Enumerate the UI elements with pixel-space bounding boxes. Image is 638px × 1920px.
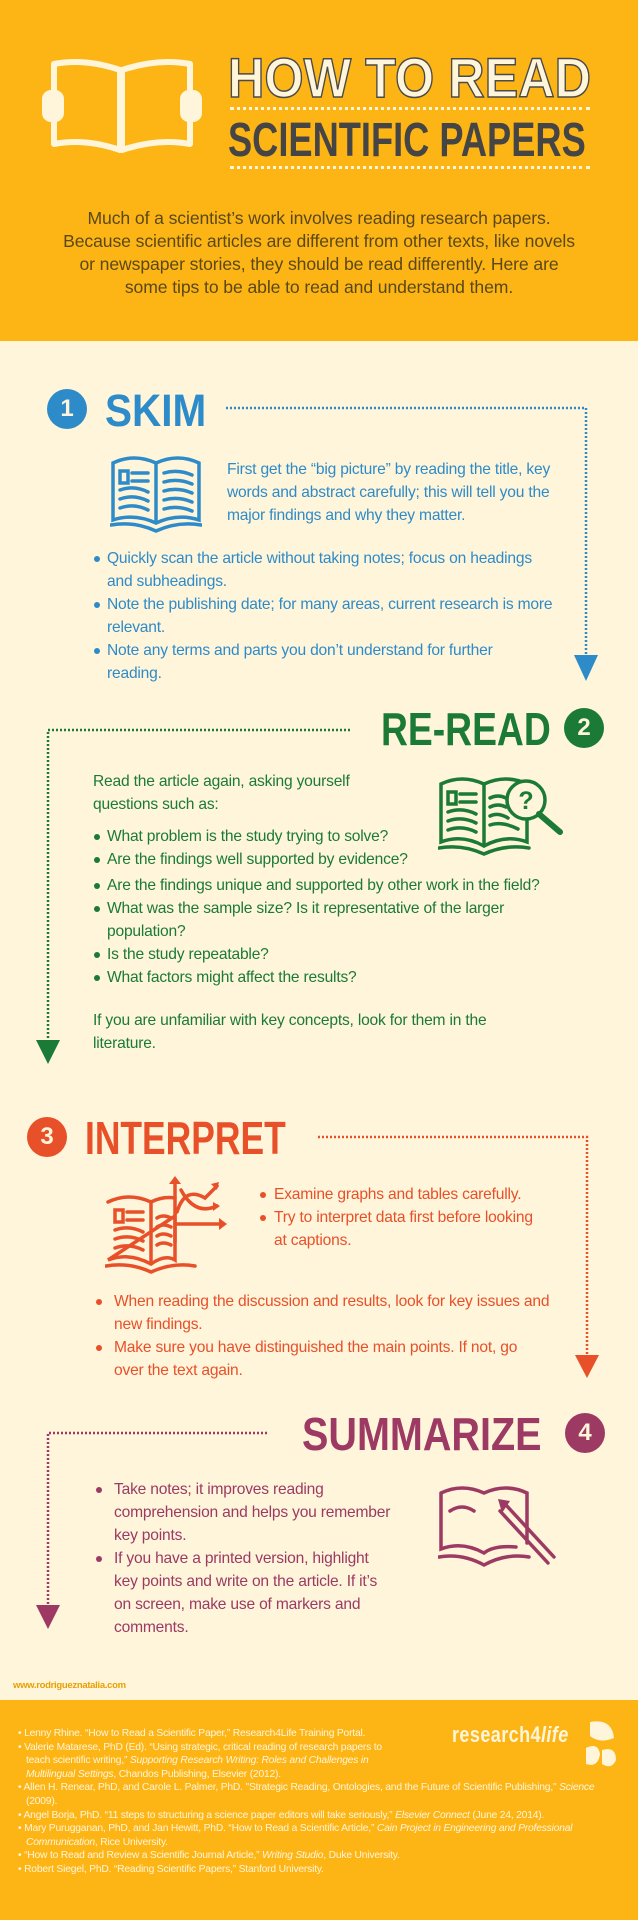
closing note: literature. bbox=[93, 1035, 156, 1052]
closing note bbox=[93, 1012, 486, 1052]
intro text: Because scientific articles are different from other texts, like novels bbox=[63, 231, 575, 251]
reference list: teach scientific writing,” Supporting Research Writing: Roles and Challenges in bbox=[26, 1755, 368, 1766]
bullet list: graphs: Examine graphs and tables carefully. bbox=[274, 1186, 521, 1203]
footer: references bbox=[0, 1700, 638, 1920]
heading: RE-READ 2: RE-READ bbox=[381, 703, 551, 755]
bullet list: If you have a printed version, highlight bbox=[114, 1550, 369, 1567]
panel: summarize bbox=[96, 1408, 605, 1636]
heading: 3 INTERPRET: INTERPRET bbox=[85, 1112, 286, 1164]
reference list: • “How to Read and Review a Scientific Journal Article,” Writing Studio, Duke University. bbox=[18, 1850, 400, 1861]
title bbox=[228, 46, 591, 169]
icon: book with pencil bbox=[438, 1486, 556, 1567]
bullet list: on screen, make use of markers and bbox=[114, 1596, 360, 1613]
title: HOW TO READ bbox=[228, 46, 591, 109]
intro text: Much of a scientist’s work involves reading research papers. bbox=[87, 208, 551, 228]
bullet list: population? bbox=[107, 923, 185, 940]
bullet list: graphs: at captions. bbox=[274, 1232, 351, 1249]
heading: 1 SKIM bbox=[47, 385, 206, 436]
bullet list bbox=[94, 828, 540, 986]
bullet list: key points. bbox=[114, 1527, 186, 1544]
bullet list: Note the publishing date; for many areas, current research is more bbox=[107, 596, 552, 613]
reference list bbox=[18, 1728, 594, 1875]
heading: 1 SKIM: 1 bbox=[60, 395, 74, 422]
bullet list bbox=[96, 1481, 390, 1636]
icon: book with magnifier bbox=[438, 777, 563, 856]
heading: SUMMARIZE 4: SUMMARIZE bbox=[302, 1408, 542, 1460]
reference list: • Robert Siegel, PhD. “Reading Scientific Papers,” Stanford University. bbox=[18, 1864, 324, 1875]
bullet list: discussion bbox=[96, 1293, 549, 1379]
bullet list: What factors might affect the results? bbox=[107, 969, 357, 986]
bullet list: graphs: Try to interpret data first before looking bbox=[274, 1209, 533, 1226]
logo: research4life: research4life bbox=[452, 1722, 569, 1747]
bullet list: Take notes; it improves reading bbox=[114, 1481, 324, 1498]
panel: interpret bbox=[27, 1112, 549, 1379]
intro text: or newspaper stories, they should be read differently. Here are bbox=[79, 254, 559, 274]
closing note: If you are unfamiliar with key concepts, look for them in the bbox=[93, 1012, 486, 1029]
bullet list: discussion: Make sure you have distinguished the main points. If not, go bbox=[114, 1339, 517, 1356]
intro text bbox=[93, 773, 350, 813]
bullet list: and subheadings. bbox=[107, 573, 227, 590]
bullet list: discussion: new findings. bbox=[114, 1316, 202, 1333]
reference list: • Lenny Rhine. “How to Read a Scientific Paper,” Research4Life Training Portal. bbox=[18, 1728, 365, 1739]
heading: 3 INTERPRET: 3 bbox=[40, 1123, 54, 1150]
arrowheads bbox=[574, 655, 598, 681]
heading: SUMMARIZE 4: 4 bbox=[578, 1419, 592, 1446]
intro text: questions such as: bbox=[93, 796, 219, 813]
bullet list: Quickly scan the article without taking notes; focus on headings bbox=[107, 550, 532, 567]
icon: book with chart arrows bbox=[105, 1176, 227, 1274]
bullet list: What problem is the study trying to solve? bbox=[107, 828, 388, 845]
intro text: major findings and why they matter. bbox=[227, 507, 465, 524]
bullet list: discussion: When reading the discussion and results, look for key issues and bbox=[114, 1293, 549, 1310]
heading: 1 SKIM: SKIM bbox=[105, 385, 206, 436]
title: SCIENTIFIC PAPERS bbox=[228, 114, 586, 167]
intro text bbox=[63, 208, 575, 297]
bullet list: reading. bbox=[107, 665, 162, 682]
bullet list: relevant. bbox=[107, 619, 165, 636]
reference list: • Valerie Matarese, PhD (Ed). “Using strategic, critical reading of research papers to bbox=[18, 1742, 382, 1753]
intro text bbox=[227, 461, 550, 524]
heading: RE-READ 2: 2 bbox=[577, 714, 591, 741]
icon: book bbox=[110, 456, 202, 533]
bullet list: comprehension and helps you remember bbox=[114, 1504, 390, 1521]
reference list: Communication, Rice University. bbox=[26, 1837, 168, 1848]
bullet list: Note any terms and parts you don’t understand for further bbox=[107, 642, 493, 659]
logo: research4life bbox=[452, 1721, 616, 1766]
bullet list: comments. bbox=[114, 1619, 188, 1636]
bullet list: discussion: over the text again. bbox=[114, 1362, 243, 1379]
intro text: Read the article again, asking yourself bbox=[93, 773, 350, 790]
panel: re-read bbox=[93, 703, 604, 1052]
intro text: words and abstract carefully; this will tell you the bbox=[227, 484, 549, 501]
bullet list: Is the study repeatable? bbox=[107, 946, 269, 963]
bullet list: Are the findings unique and supported by other work in the field? bbox=[107, 877, 540, 894]
reference list: • Mary Purugganan, PhD, and Jan Hewitt, PhD. “How to Read a Scientific Article,” Cain Project in Engineering and Professional bbox=[18, 1823, 572, 1834]
intro text: some tips to be able to read and understand them. bbox=[125, 277, 513, 297]
website credit: www.rodrigueznatalia.com bbox=[13, 1680, 126, 1691]
bullet list bbox=[94, 550, 552, 682]
icon: open book held by hands bbox=[42, 59, 202, 153]
intro text: First get the “big picture” by reading the title, key bbox=[227, 461, 550, 478]
bullet list: What was the sample size? Is it representative of the larger bbox=[107, 900, 504, 917]
reference list: • Allen H. Renear, PhD, and Carole L. Palmer, PhD. "Strategic Reading, Ontologies, and the Future of Scientific Publishing," Science bbox=[18, 1782, 594, 1793]
reference list: Multilingual Settings, Chandos Publishing, Elsevier (2012). bbox=[26, 1769, 281, 1780]
header band bbox=[0, 0, 638, 341]
bullet list: Are the findings well supported by evidence? bbox=[107, 851, 408, 868]
panel: skim bbox=[47, 385, 552, 682]
reference list: • Angel Borja, PhD. “11 steps to structuring a science paper editors will take seriously,” Elsevier Connect (June 24, 2014). bbox=[18, 1810, 544, 1821]
bullet list: key points and write on the article. If it’s bbox=[114, 1573, 377, 1590]
bullet list: graphs bbox=[260, 1186, 533, 1249]
reference list: (2009). bbox=[26, 1796, 57, 1807]
icon: book with magnifier: ? bbox=[518, 787, 534, 815]
